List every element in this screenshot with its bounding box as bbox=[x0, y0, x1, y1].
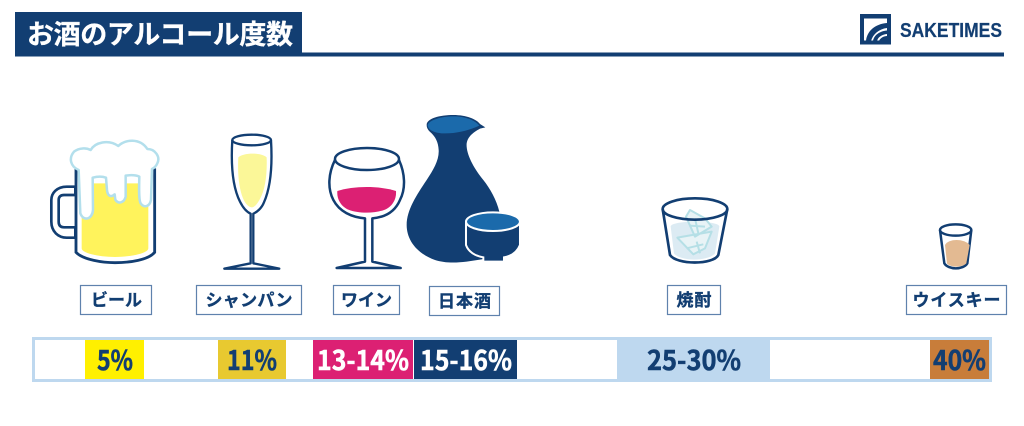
label: wine bbox=[334, 286, 400, 314]
label: wine: ワイン bbox=[341, 286, 392, 311]
segment: sake 15-16%: 15-16% bbox=[420, 339, 512, 378]
label: sake: 日本酒 bbox=[438, 287, 491, 312]
label: beer: ビール bbox=[91, 286, 142, 311]
segment: shochu 25-30%: 25-30% bbox=[647, 339, 741, 378]
label: beer bbox=[80, 286, 152, 314]
title: お酒のアルコール度数 bbox=[27, 13, 293, 52]
icon: beer mug bbox=[51, 141, 158, 263]
segment: whisky 40%: 40% bbox=[933, 339, 986, 378]
icon: champagne flute bbox=[224, 135, 279, 269]
segment: beer 5%: 5% bbox=[97, 339, 133, 378]
icon: whisky glass bbox=[940, 224, 971, 268]
icon: wine glass bbox=[329, 148, 404, 268]
logo: SAKETIMES bbox=[860, 14, 1002, 44]
segment: wine 13-14%: 13-14% bbox=[317, 339, 409, 378]
alcohol content bar bbox=[34, 338, 990, 380]
icon: sake flask and cup bbox=[407, 115, 520, 263]
segment: beer 5% bbox=[85, 339, 144, 379]
label: shochu bbox=[668, 286, 720, 314]
icon: shochu glass with ice bbox=[663, 198, 727, 262]
logo: SAKETIMES: SAKETIMES bbox=[900, 20, 1002, 42]
label: shochu: 焼酎 bbox=[676, 286, 712, 311]
label: champagne: シャンパン bbox=[206, 286, 292, 311]
segment: champagne 11%: 11% bbox=[227, 339, 277, 378]
segment: shochu 25-30% bbox=[617, 339, 770, 379]
label: sake bbox=[430, 286, 500, 316]
label: whisky: ウイスキー bbox=[912, 286, 1000, 311]
title banner bbox=[15, 12, 1004, 56]
